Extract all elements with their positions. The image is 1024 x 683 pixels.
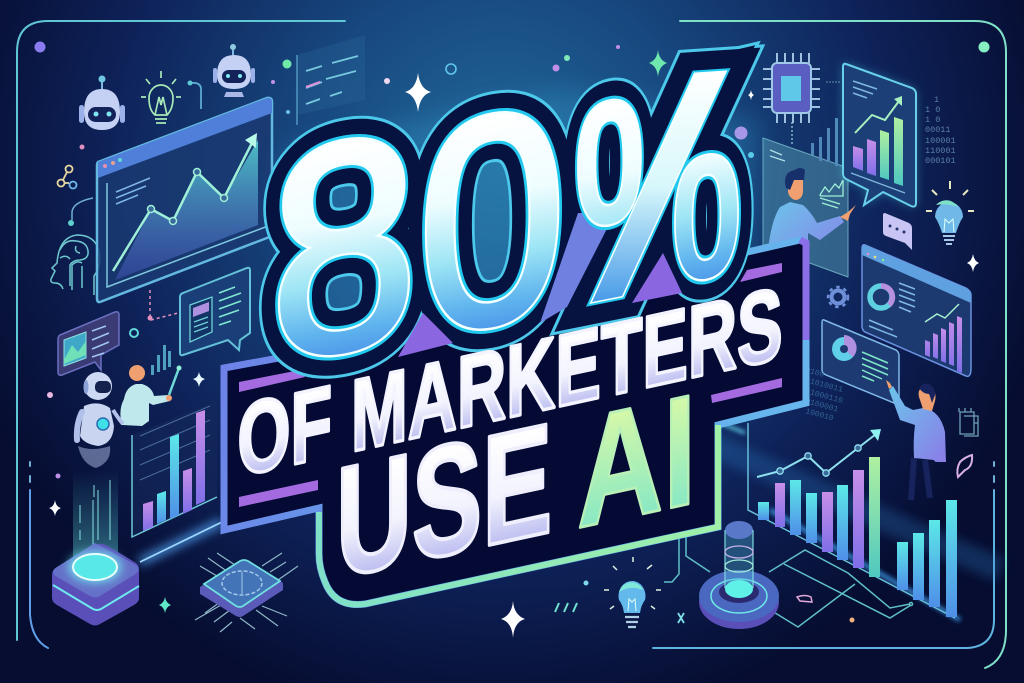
binary digits: 1 0 <box>925 115 940 125</box>
panel: pie chart card <box>822 320 899 405</box>
icon: gear <box>828 287 848 307</box>
panel: document card top <box>297 35 365 125</box>
binary texture: 0100001 <box>804 397 839 415</box>
white edge: 80 <box>270 43 566 426</box>
person pointing right lower <box>886 380 946 500</box>
panel: speech bubble bar chart <box>843 64 916 207</box>
icon: glowing lightbulb right <box>926 181 974 244</box>
headline: 80% <box>270 23 758 426</box>
small outline icons right <box>957 408 978 477</box>
headline: ai: AI <box>577 360 696 561</box>
outline: navy: 80 <box>270 43 566 426</box>
neon edge <box>270 23 743 426</box>
gradient fill: 80 <box>270 43 566 426</box>
white edge <box>270 23 743 426</box>
panel: dashboard donut <box>862 245 971 376</box>
person pointing right upper <box>767 168 856 272</box>
icon: brain chip <box>195 553 298 632</box>
chart: right bar chart with trend arrow <box>718 422 957 618</box>
gradient fill: % <box>573 23 743 358</box>
purple triangles <box>398 213 682 357</box>
bottom bulb <box>604 557 661 627</box>
small bars near person <box>151 345 171 375</box>
circuit lines bottom <box>664 535 912 627</box>
icon: network nodes <box>58 166 76 188</box>
cylinder platform <box>699 521 812 629</box>
hologram column <box>73 470 118 570</box>
icon: line lightbulb <box>141 71 201 123</box>
neon edge: 80 <box>270 43 566 426</box>
glow behind headline <box>280 90 760 400</box>
panel: main line chart window <box>97 98 272 302</box>
area under line <box>115 140 258 280</box>
outline: cyan ring <box>270 23 743 426</box>
headline: of marketers: OF MARKETERS <box>237 265 783 499</box>
light beam <box>140 522 222 562</box>
outline: navy <box>270 23 743 426</box>
panel: image card <box>58 312 119 375</box>
person presenter left <box>120 359 182 426</box>
robot head 2 <box>213 44 255 97</box>
white edge: % <box>573 23 743 358</box>
icon: chat bubble small <box>883 213 912 250</box>
purple stripes <box>239 370 305 392</box>
binary texture: 100010 <box>804 407 835 423</box>
glow floor right <box>700 440 1000 620</box>
chart panel: person pointing backdrop <box>763 118 848 277</box>
chart: left bar chart <box>132 400 217 537</box>
robot head 1 <box>79 76 125 130</box>
binary texture: 11000110 <box>804 387 844 406</box>
binary digits: 000101 <box>925 156 956 166</box>
binary texture: 11010011 <box>804 376 844 395</box>
binary digits: 110001 <box>925 146 956 156</box>
platform: hologram base <box>52 543 139 626</box>
binary digits: 1 0 <box>925 105 940 115</box>
binary texture <box>804 366 844 423</box>
binary digits <box>925 95 956 166</box>
outline: slash tip <box>600 43 758 280</box>
purple upper right border <box>800 240 806 340</box>
binary texture: 0100 <box>804 366 825 380</box>
banner border <box>224 240 806 605</box>
banner <box>224 240 806 605</box>
icon: processor chip <box>763 53 840 123</box>
green lower border <box>319 425 718 605</box>
icon: brain head <box>51 198 100 295</box>
binary digits: 1 <box>934 95 939 105</box>
binary digits: 00011 <box>925 125 951 135</box>
headline: use: USE <box>336 389 552 612</box>
neon edge: % <box>573 23 743 358</box>
binary digits: 100001 <box>925 136 956 146</box>
panel: chat bubble window <box>148 268 250 355</box>
robot with hologram <box>73 372 123 570</box>
gradient fill <box>270 23 743 426</box>
outline: cyan ring: % <box>573 23 743 358</box>
outline: navy: % <box>573 23 743 358</box>
outline: cyan ring: 80 <box>270 43 566 426</box>
